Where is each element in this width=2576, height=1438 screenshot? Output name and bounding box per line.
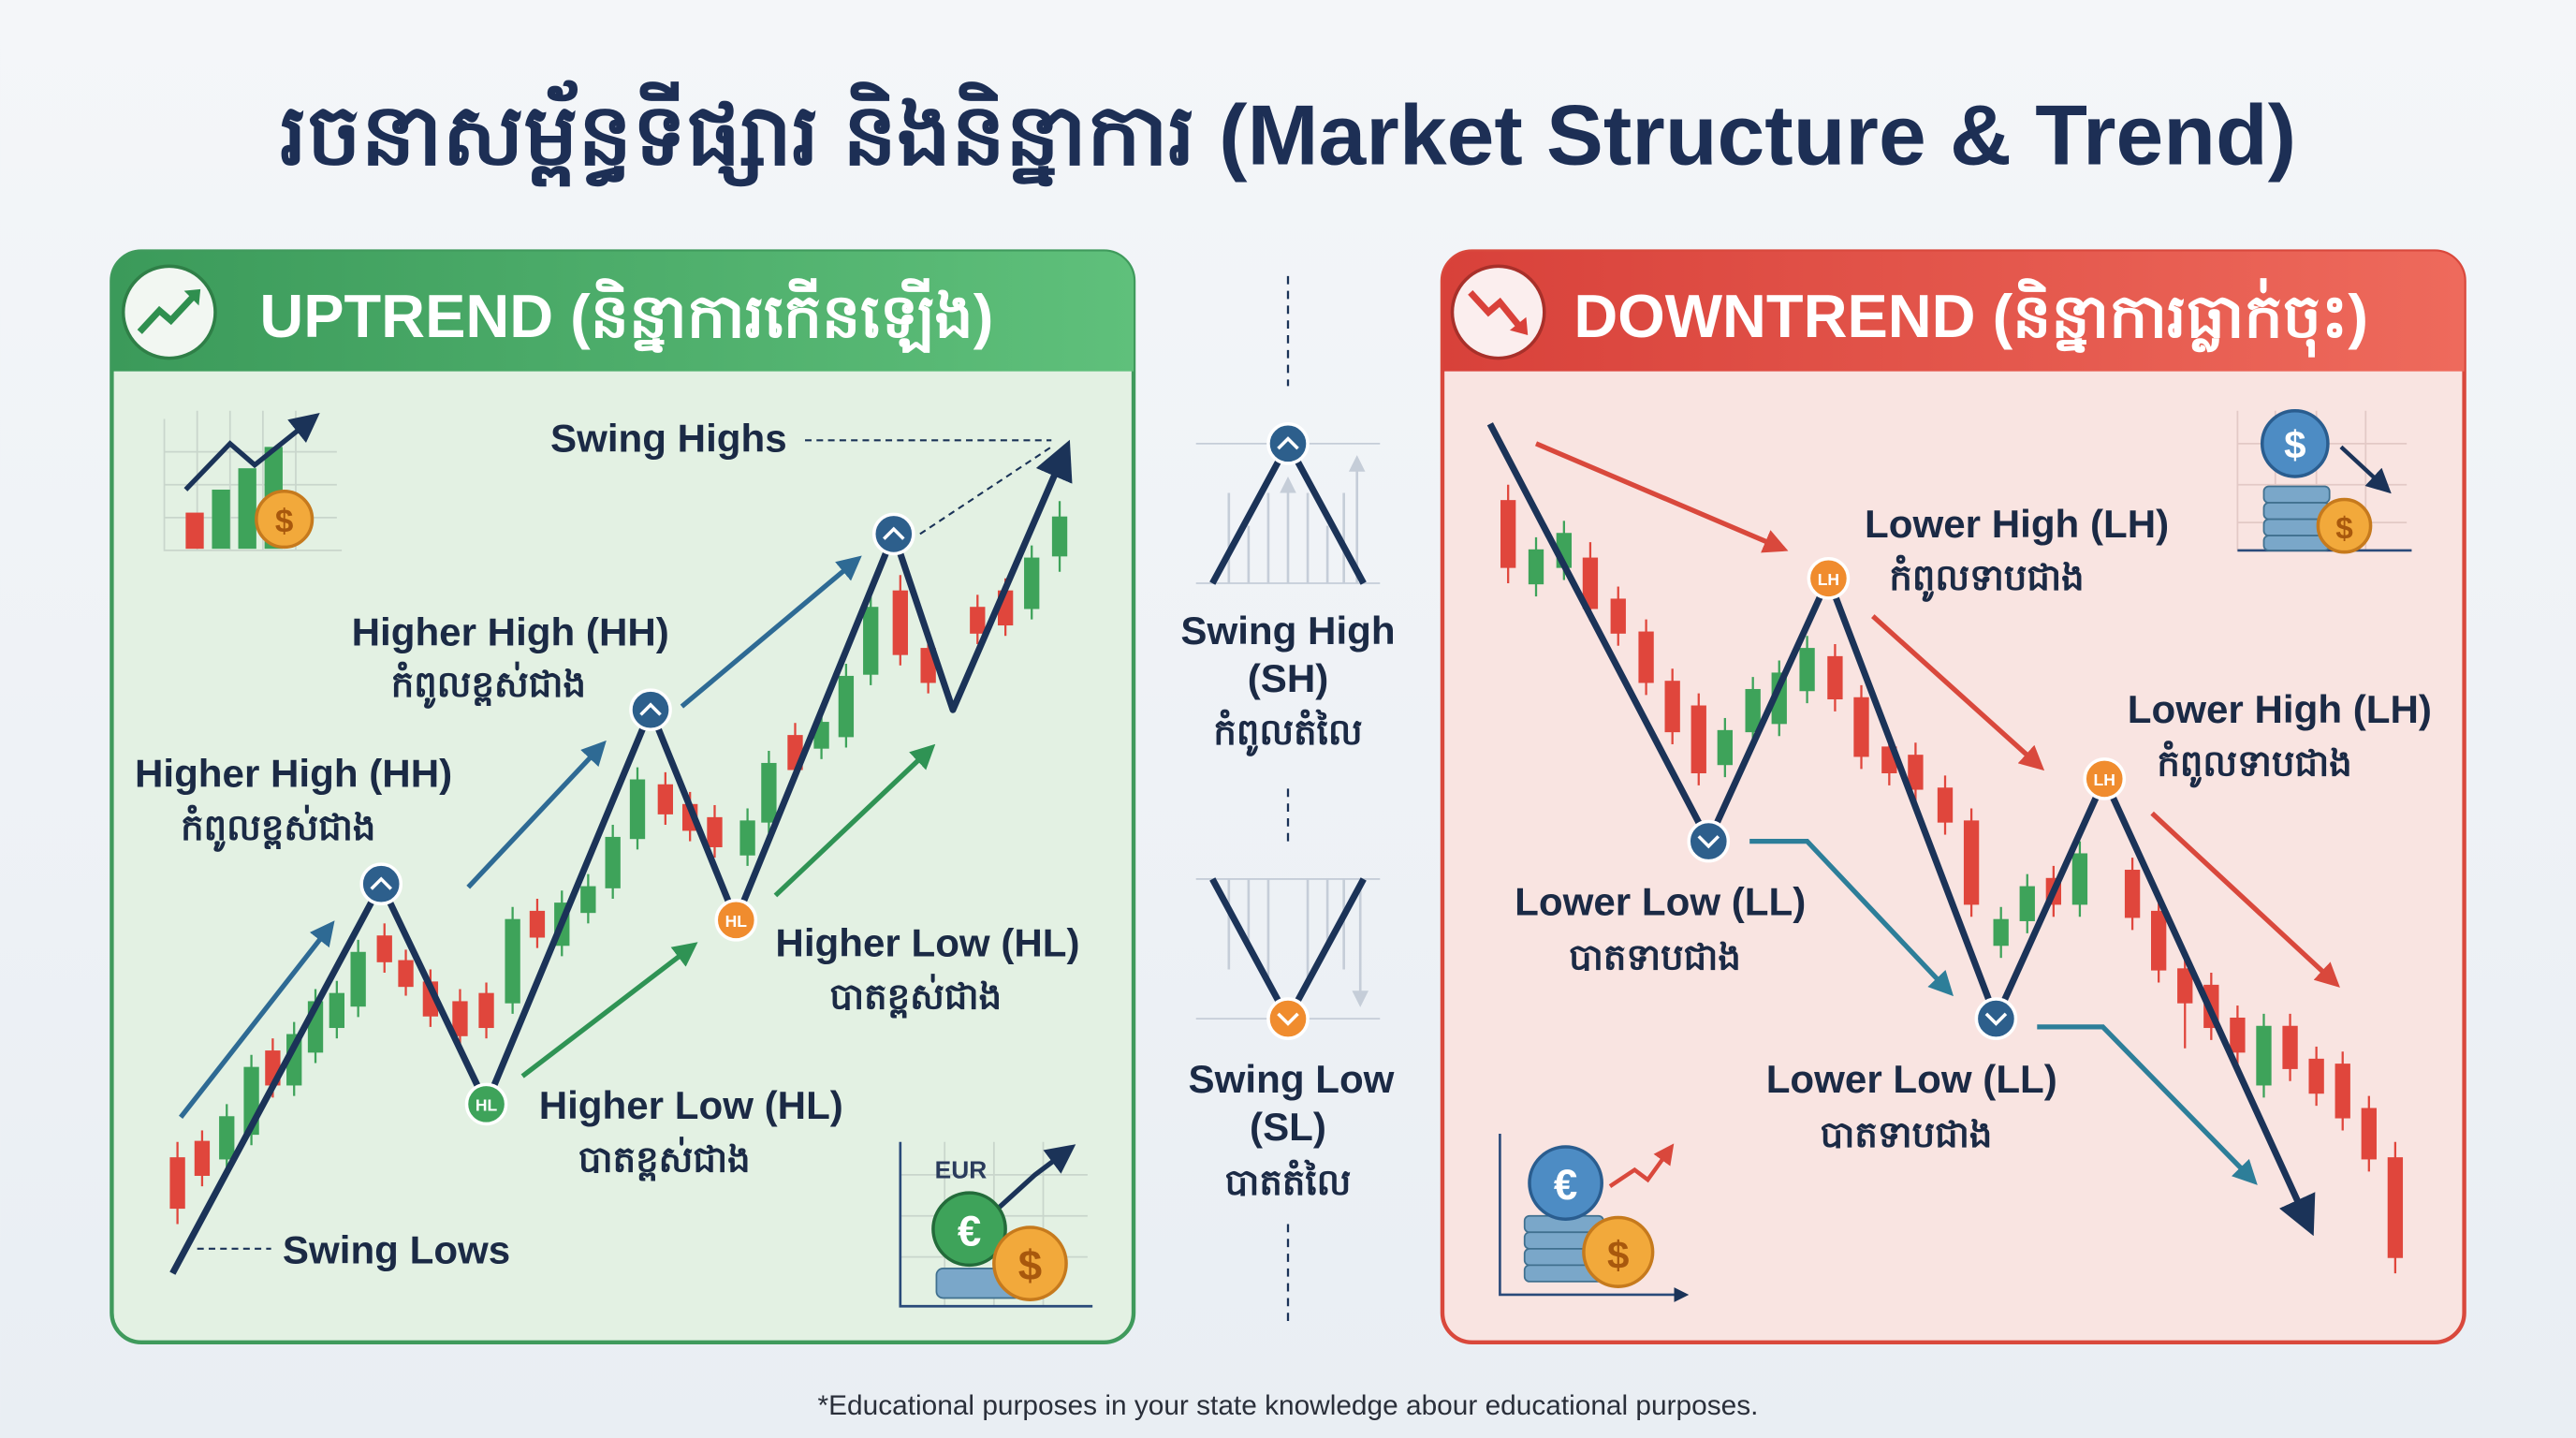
icon: dollar coin stack [2237,411,2411,552]
downtrend header [1442,252,2465,372]
icon: EUR coins [900,1142,1092,1306]
panel: uptrend: HL [476,1095,498,1114]
uptrend labels: Higher Low (HL) [775,920,1080,964]
downtrend zigzag price line [1490,424,2308,1224]
panel: swing low concept: (SL) [1250,1105,1326,1149]
icon: dollar coin stack: $ [2284,423,2306,467]
downtrend labels [1515,502,2432,1155]
panel: swing high concept: Swing High [1180,609,1396,653]
downtrend labels: កំពូលទាបជាង [1889,554,2085,602]
uptrend labels: បាតខ្ពស់ជាង [829,974,1002,1020]
downtrend labels: Lower High (LH) [1865,502,2169,546]
uptrend header: UPTREND (និន្នាការកើនឡើង) [259,278,993,353]
panel: swing low concept: Swing Low [1189,1057,1395,1101]
panel: swing high concept [1180,424,1396,756]
downtrend candlesticks [1501,485,2402,1273]
uptrend labels: កំពូលខ្ពស់ជាង [391,661,586,709]
panel: downtrend [1442,252,2465,1343]
icon: EUR coins: EUR [935,1155,987,1183]
downtrend labels: Lower Low (LL) [1766,1057,2057,1101]
uptrend labels: បាតខ្ពស់ជាង [578,1136,751,1181]
icon: euro and dollar coins: $ [1607,1233,1629,1277]
icon: bar chart with coin [165,411,342,550]
title: រចនាសម្ព័ន្ធទីផ្សារ និងនិន្នាការ (Market Structure & Trend) [280,80,2296,187]
uptrend zigzag price line [172,452,1064,1273]
uptrend labels: Swing Highs [550,417,787,461]
uptrend labels: Higher Low (HL) [539,1083,843,1127]
panel: swing high concept: (SH) [1248,656,1328,700]
uptrend labels [135,417,1080,1272]
uptrend header [111,252,1134,372]
markers: swing points downtrend [1689,559,2124,1038]
icon: dollar coin stack: $ [2335,512,2353,547]
panel: downtrend: LH [2094,770,2115,789]
uptrend labels: Higher High (HH) [135,752,452,796]
uptrend helper arrows [181,562,929,1117]
panel: swing high concept: កំពូលតំលៃ [1213,709,1363,756]
downtrend header: DOWNTREND (និន្នាការធ្លាក់ចុះ) [1573,278,2368,358]
panel: uptrend: HL [725,912,747,931]
uptrend candlesticks [171,501,1066,1224]
uptrend labels: Swing Lows [283,1228,510,1272]
uptrend labels: កំពូលខ្ពស់ជាង [181,804,375,852]
icon: EUR coins: $ [1018,1241,1042,1289]
uptrend labels: Higher High (HH) [352,610,669,654]
downtrend labels: បាតទាបជាង [1821,1115,1992,1155]
panel: swing low concept [1189,879,1395,1203]
panel: downtrend: LH [1818,570,1839,589]
icon: euro and dollar coins [1500,1134,1684,1295]
downtrend labels: កំពូលទាបជាង [2157,740,2352,787]
icon: bar chart with coin: $ [275,504,294,540]
icon: EUR coins: € [958,1207,981,1255]
swing highs dashed guides [198,440,1051,1249]
panel: swing low concept: បាតតំលៃ [1225,1159,1351,1203]
downtrend labels: Lower High (LH) [2128,687,2432,731]
footnote: *Educational purposes in your state knowledge abour educational purposes. [818,1390,1758,1421]
downtrend helper arrows [1536,444,2333,1178]
downtrend labels: Lower Low (LL) [1515,880,1806,924]
icon: euro and dollar coins: € [1554,1161,1577,1209]
panel: uptrend [111,252,1134,1343]
divider: middle dashed line [1287,276,1289,1323]
markers: swing points uptrend [361,514,914,1123]
downtrend labels: បាតទាបជាង [1569,937,1741,977]
